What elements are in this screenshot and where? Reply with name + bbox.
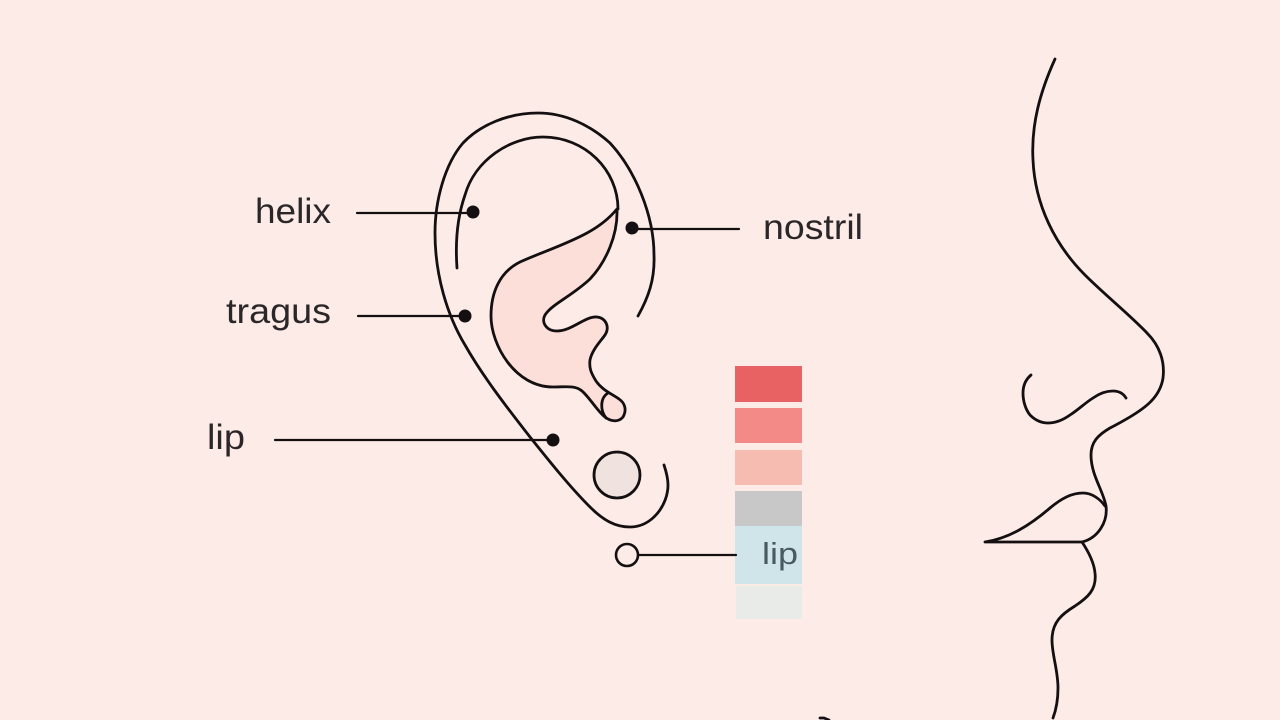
ear concha shaded shape <box>491 209 625 421</box>
swatch 6 <box>736 586 802 619</box>
face profile <box>1033 59 1163 718</box>
swatch 2 <box>735 408 802 443</box>
swatch 1 <box>735 366 802 402</box>
colour swatch stack <box>735 366 802 619</box>
face nostril <box>1023 375 1126 423</box>
ear outer rim <box>435 113 668 527</box>
swatch 3 <box>735 450 802 485</box>
label: tragus: tragus <box>226 292 331 331</box>
label: lip: lip <box>207 418 245 457</box>
label: nostril: nostril <box>763 208 863 247</box>
ear lobe disc <box>594 452 640 498</box>
swatch 4 <box>735 491 802 526</box>
ear inner helix <box>456 137 618 268</box>
label: lip <box>207 418 560 457</box>
bottom partial mark <box>820 718 829 720</box>
swatch 5 <box>735 526 802 584</box>
label: helix: helix <box>255 192 332 231</box>
label: tragus <box>226 292 472 331</box>
connector with ring to swatch label <box>616 544 736 566</box>
swatch label: lip: lip <box>762 536 798 571</box>
ear lobe small ring <box>602 393 608 418</box>
ear illustration <box>435 113 668 527</box>
label: nostril <box>626 208 863 247</box>
face upper lip <box>985 493 1105 542</box>
label: helix <box>255 192 480 231</box>
